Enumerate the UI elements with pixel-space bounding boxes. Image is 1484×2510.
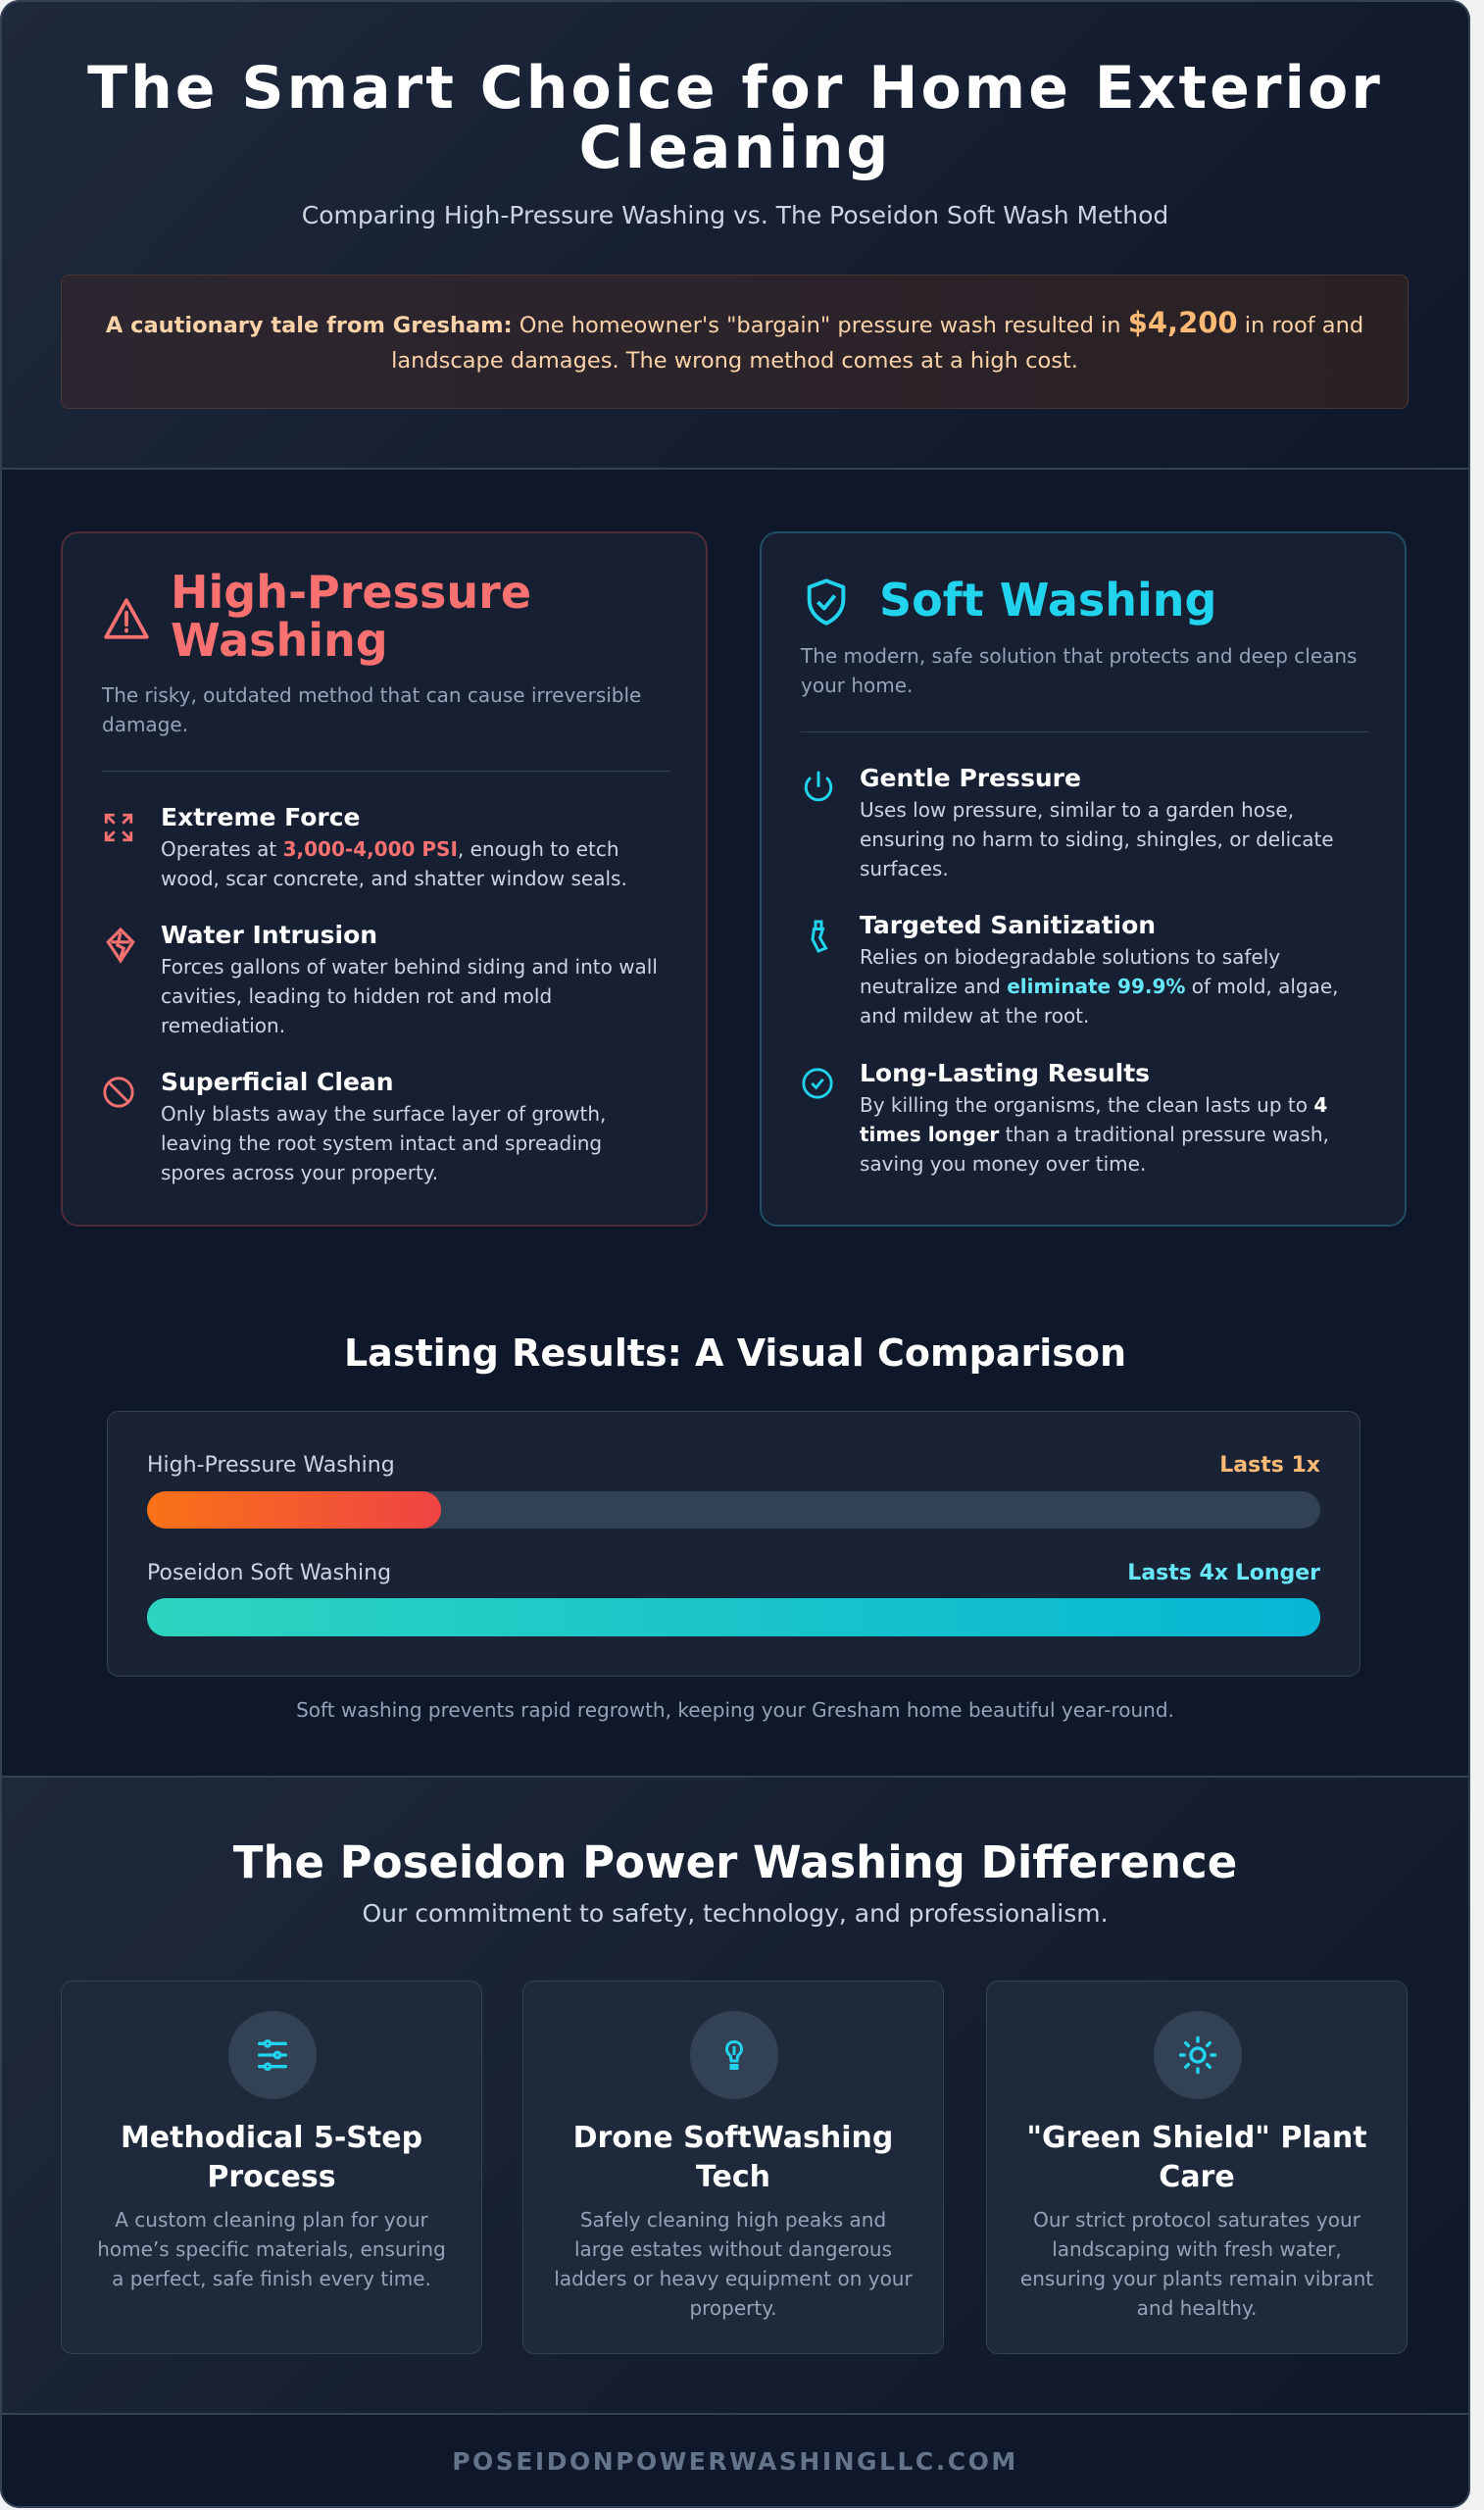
title: Cleaning (579, 114, 891, 182)
item: gentle pressure (804, 764, 1334, 880)
icon: spray (812, 920, 828, 953)
bar chart: comparison: Lasts 1x (1219, 1453, 1320, 1478)
icon: power (804, 771, 833, 802)
bar chart: comparison (107, 1411, 1360, 1677)
feature card: 5-step process: A custom cleaning plan for your home’s specific materials, ensuring a perfect, safe finish every time. (97, 2208, 446, 2290)
heading: Washing (171, 614, 388, 667)
heading: Soft Washing (879, 574, 1216, 627)
bar: soft washing (147, 1598, 1320, 1636)
section: poseidon difference (0, 1776, 1470, 2415)
callout: cautionary tale: A cautionary tale from Gresham: One homeowner's "bargain" pressure wash resulted in $4,200 in roof and (106, 306, 1363, 339)
panel: soft washing: Relies on biodegradable solutions to safely neutralize and eliminate 99.9% of mold, algae, and mildew at the root. (860, 945, 1339, 1028)
panel: soft washing: Targeted Sanitization (860, 911, 1156, 939)
item: superficial clean (103, 1068, 606, 1184)
panel: high-pressure washing: Extreme Force (161, 803, 361, 831)
panel: soft washing: Uses low pressure, similar to a garden hose, ensuring no harm to siding, shingles, or delicate surfaces. (860, 798, 1334, 880)
title: The Smart Choice for Home Exterior (87, 54, 1383, 123)
heading (171, 566, 531, 667)
icon: prohibited (103, 1077, 134, 1108)
icon: shield check (808, 578, 845, 626)
item: extreme force (104, 803, 627, 890)
header section (0, 0, 1470, 470)
panel: soft washing (760, 531, 1407, 1227)
feature card: 5-step process: Methodical 5-Step Process (121, 2121, 422, 2194)
icon: water burst (106, 928, 135, 964)
feature card: 5-step process (61, 1981, 482, 2354)
feature card: green shield: Our strict protocol saturates your landscaping with fresh water, ensuring your plants remain vibrant and healthy. (1020, 2208, 1373, 2320)
panel: high-pressure washing (61, 531, 708, 1227)
panel: soft washing: By killing the organisms, the clean lasts up to 4 times longer than a traditional pressure wash, saving you money over time. (860, 1093, 1329, 1176)
caption: Soft washing prevents rapid regrowth, keeping your Gresham home beautiful year-round. (296, 1698, 1174, 1722)
panel: soft washing: Long-Lasting Results (860, 1059, 1150, 1087)
icon: drone/bulb (690, 2011, 778, 2099)
heading: The Poseidon Power Washing Difference (233, 1836, 1237, 1888)
icon: sun (1154, 2011, 1242, 2099)
bar chart: comparison: Lasts 4x Longer (1127, 1561, 1320, 1585)
item: water intrusion (106, 921, 658, 1037)
bar label: soft washing: Poseidon Soft Washing (147, 1561, 391, 1585)
panel: high-pressure washing: Water Intrusion (161, 921, 377, 949)
bar: high-pressure (147, 1491, 1320, 1529)
description: The risky, outdated method that can cause irreversible damage. (102, 683, 641, 736)
item: targeted sanitization (812, 911, 1339, 1028)
heading: lasting results: Lasting Results: A Visual Comparison (344, 1331, 1126, 1375)
feature card: green shield: "Green Shield" Plant Care (1026, 2121, 1367, 2194)
callout: cautionary tale: landscape damages. The wrong method comes at a high cost. (391, 348, 1078, 374)
callout: cautionary tale (61, 275, 1409, 409)
subtitle: Comparing High-Pressure Washing vs. The Poseidon Soft Wash Method (302, 201, 1168, 229)
description: The modern, safe solution that protects and deep cleans your home. (801, 644, 1357, 697)
icon: sliders (228, 2011, 317, 2099)
panel: high-pressure washing: Operates at 3,000-4,000 PSI, enough to etch wood, scar concrete, and shatter window seals. (161, 837, 627, 890)
panel: soft washing: Gentle Pressure (860, 764, 1081, 792)
panel: high-pressure washing: Forces gallons of water behind siding and into wall cavities, leading to hidden rot and mold remediation. (161, 955, 658, 1037)
feature card: drone: large estates without dangerous ladders or heavy equipment on your property. (554, 2237, 913, 2320)
icon: warning triangle (104, 598, 149, 639)
panel: high-pressure washing: Only blasts away the surface layer of growth, leaving the root system intact and spreading spores across your property. (161, 1102, 606, 1184)
feature card: green shield (986, 1981, 1408, 2354)
title (87, 54, 1383, 182)
feature card: drone: Drone SoftWashing Tech (573, 2121, 893, 2194)
subheading: Our commitment to safety, technology, and professionalism. (362, 1899, 1109, 1928)
icon: check circle (802, 1068, 833, 1099)
heading: High-Pressure (171, 566, 531, 619)
panel: high-pressure washing: Superficial Clean (161, 1068, 394, 1096)
footer: website: POSEIDONPOWERWASHINGLLC.COM (452, 2447, 1018, 2476)
icon: expand arrows (104, 814, 133, 841)
bar label: high-pressure: High-Pressure Washing (147, 1453, 395, 1478)
feature card: drone: Safely cleaning high peaks and (580, 2208, 886, 2232)
item: long-lasting results (802, 1059, 1329, 1176)
feature card: drone (522, 1981, 944, 2354)
